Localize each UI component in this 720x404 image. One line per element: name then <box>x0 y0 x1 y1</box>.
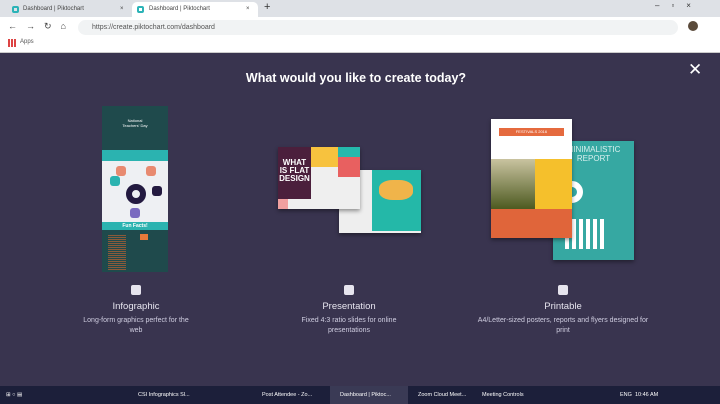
printable thumbnail: REPORT <box>577 154 610 163</box>
tab 1: × <box>120 6 124 12</box>
title: What would you like to create today? <box>246 71 466 85</box>
browser tab bar <box>0 0 720 17</box>
browser tab bar: + <box>264 1 270 13</box>
option: printable: A4/Letter-sized posters, reports and flyers designed for print <box>478 317 648 334</box>
tab 1: Dashboard | Piktochart <box>23 6 84 12</box>
presentation thumbnail: WHAT IS FLAT DESIGN <box>279 158 310 183</box>
taskbar: Zoom Cloud Meet... <box>418 392 466 398</box>
infographic thumbnail: Fun Facts! <box>122 223 148 229</box>
taskbar: Meeting Controls <box>482 392 524 398</box>
taskbar: ENG 10:46 AM <box>620 392 658 398</box>
icon: printable <box>558 285 568 295</box>
tab 1 <box>12 6 124 13</box>
printable thumbnail: MINIMALISTIC <box>567 145 620 154</box>
option: infographic <box>83 285 189 334</box>
taskbar: Dashboard | Piktoc... <box>340 392 391 398</box>
option: infographic: Infographic <box>112 301 160 312</box>
printable thumbnail <box>490 119 636 264</box>
browser tab bar: –▫× <box>655 1 703 10</box>
option: printable <box>478 285 648 334</box>
icon: bar chart <box>131 285 141 295</box>
option: infographic: Long-form graphics perfect for the web <box>83 317 189 334</box>
address bar <box>0 17 720 53</box>
address bar: https://create.piktochart.com/dashboard <box>92 24 215 31</box>
option: presentation <box>302 285 396 334</box>
option: printable: Printable <box>544 301 582 312</box>
address bar: Apps <box>20 39 34 45</box>
taskbar: Post Attendee - Zo... <box>262 392 312 398</box>
tab 2 active <box>132 2 258 17</box>
printable thumbnail: FESTIVALS 2016 <box>516 129 547 134</box>
tab 2 active: × <box>246 6 250 12</box>
option: presentation: Fixed 4:3 ratio slides for online presentations <box>302 317 396 334</box>
close icon: ✕ <box>688 60 702 79</box>
taskbar <box>0 386 720 404</box>
address bar: ←→↻⌂ <box>8 21 75 31</box>
tab 2 active: Dashboard | Piktochart <box>149 6 210 12</box>
option: presentation: Presentation <box>322 301 376 312</box>
icon: presentation <box>344 285 354 295</box>
infographic thumbnail: National Teachers' Day <box>122 118 148 128</box>
taskbar: CSI Infographics Sl... <box>138 392 190 398</box>
presentation thumbnail <box>276 147 422 236</box>
infographic thumbnail <box>102 106 168 272</box>
taskbar: ⊞ ○ ▤ <box>6 392 22 398</box>
